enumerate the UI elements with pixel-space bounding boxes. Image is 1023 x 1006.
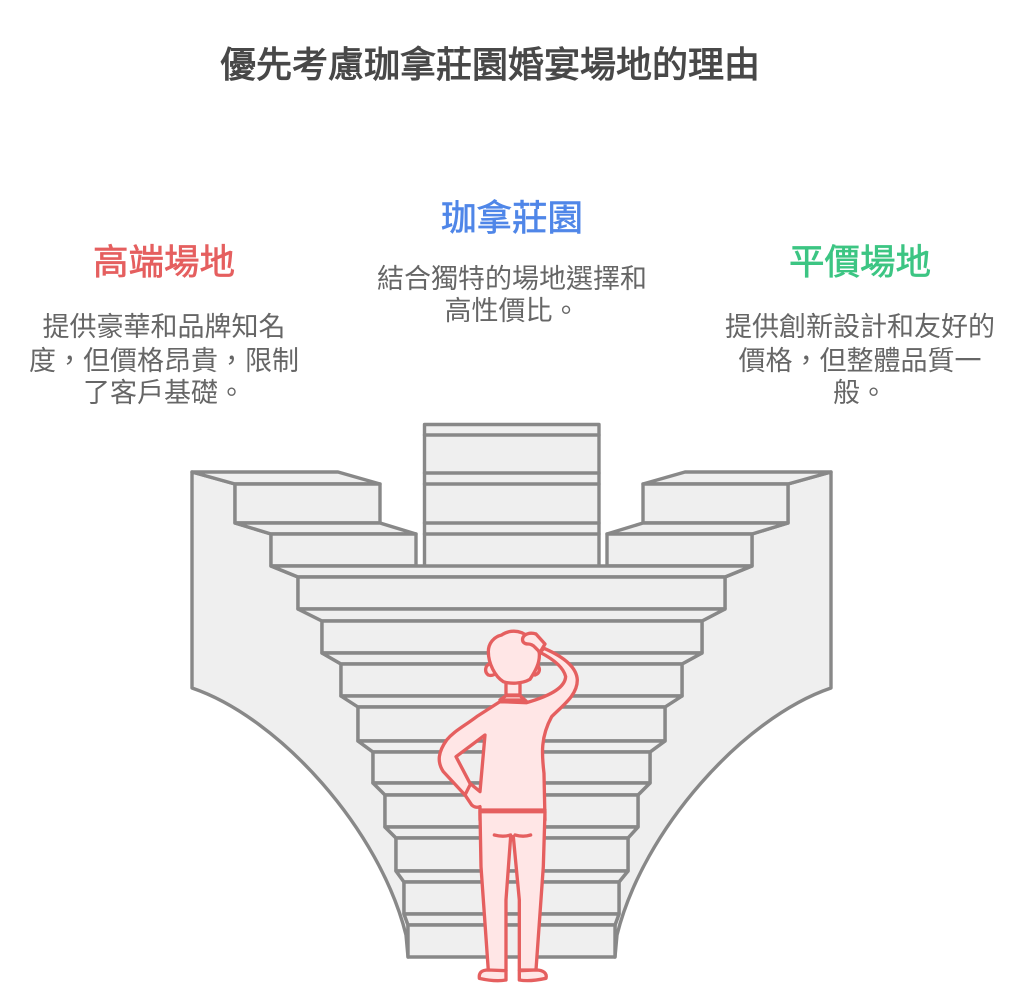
main step 7 bbox=[385, 827, 638, 871]
upper right step 2 bbox=[607, 523, 788, 566]
person scratching head bbox=[439, 631, 577, 981]
upper body bbox=[439, 631, 577, 820]
left side wall bbox=[192, 472, 408, 957]
neck bbox=[500, 682, 527, 702]
text block: affordable venues: 價格，但整體品質一 bbox=[738, 346, 982, 376]
main step 2 bbox=[298, 609, 725, 653]
seat lines bbox=[494, 835, 531, 836]
text block: high-end venues: 提供豪華和品牌知名 bbox=[42, 312, 286, 342]
main step 5 bbox=[358, 741, 665, 783]
upper left step 2 bbox=[235, 523, 416, 566]
main step 1 bbox=[271, 566, 752, 609]
text block: high-end venues bbox=[29, 312, 299, 408]
head bbox=[488, 631, 539, 683]
text block: affordable venues: 提供創新設計和友好的 bbox=[725, 312, 995, 342]
center column bbox=[424, 424, 599, 566]
left foot bbox=[479, 970, 506, 981]
heading: high-end venues: 高端場地 bbox=[93, 242, 235, 282]
upper left step 1 bbox=[192, 472, 380, 523]
upper right step 1 bbox=[643, 472, 831, 523]
ears bbox=[486, 663, 539, 675]
hand on head bbox=[523, 633, 545, 652]
main step 8 bbox=[396, 871, 628, 914]
text block: Jiana Manor: 結合獨特的場地選擇和 bbox=[377, 264, 647, 294]
heading: Jiana Manor: 珈拿莊園 bbox=[441, 198, 583, 238]
wrist and hem lines bbox=[465, 785, 545, 810]
text block: affordable venues: 般。 bbox=[833, 378, 887, 408]
legs bbox=[479, 812, 546, 981]
text block: high-end venues: 了客戶基礎。 bbox=[83, 378, 245, 408]
text block: affordable venues bbox=[725, 312, 995, 408]
torso and arms bbox=[439, 648, 577, 820]
main step 4 bbox=[341, 696, 682, 741]
heading: affordable venues: 平價場地 bbox=[789, 242, 931, 282]
text block: Jiana Manor: 高性價比。 bbox=[444, 296, 580, 326]
title: 優先考慮珈拿莊園婚宴場地的理由 bbox=[220, 44, 760, 85]
right side wall bbox=[615, 472, 831, 957]
text block: high-end venues: 度，但價格昂貴，限制 bbox=[29, 346, 299, 376]
staircase bbox=[192, 424, 831, 957]
main step 6 bbox=[373, 783, 650, 827]
main step 3 bbox=[322, 653, 702, 696]
text block: Jiana Manor bbox=[377, 264, 647, 326]
right foot bbox=[519, 970, 546, 981]
main step 9 bbox=[404, 914, 619, 957]
